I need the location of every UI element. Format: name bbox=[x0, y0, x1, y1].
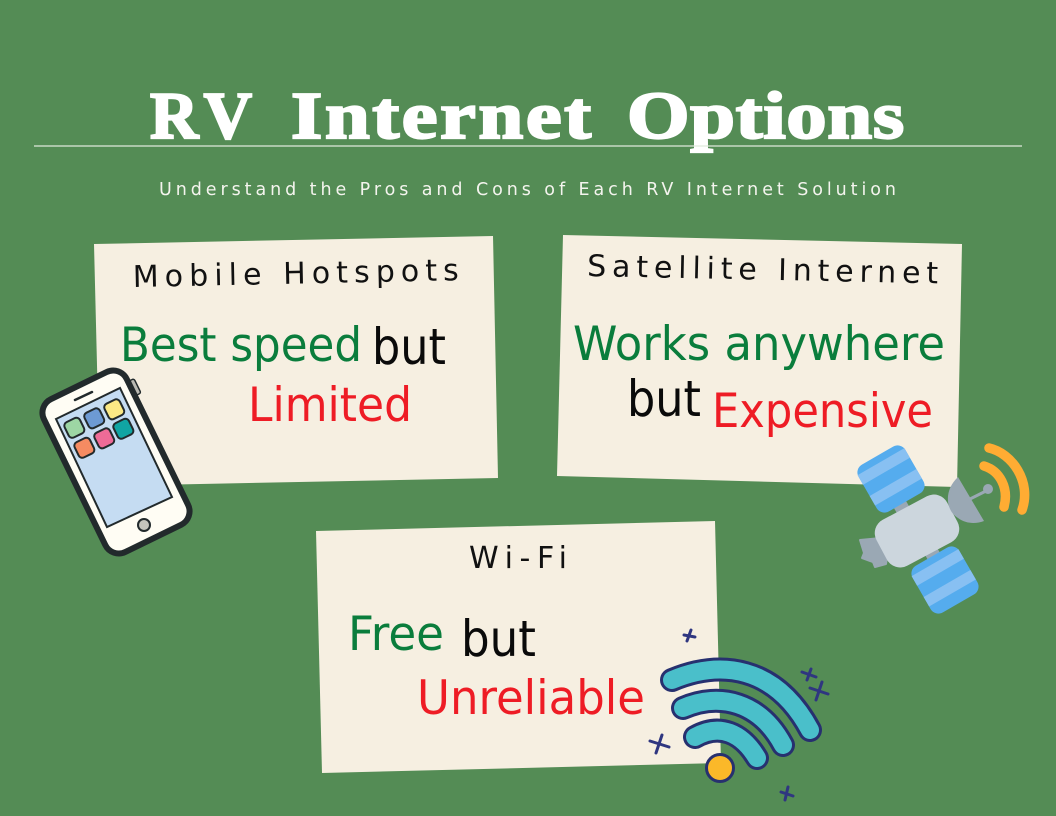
text: limited: Limited bbox=[248, 378, 412, 433]
panel: wi-fi bbox=[316, 521, 721, 773]
text: best speed: Best speed bbox=[120, 318, 362, 373]
text: works anywhere: Works anywhere bbox=[573, 317, 945, 372]
icon: satellite bbox=[854, 442, 1025, 617]
text: expensive: Expensive bbox=[712, 384, 933, 439]
heading: wi-fi: Wi-Fi bbox=[469, 541, 567, 576]
title: Options bbox=[627, 79, 904, 153]
heading: mobile hotspots: Mobile Hotspots bbox=[132, 253, 459, 295]
text: but: but bbox=[627, 370, 701, 428]
subtitle: Understand the Pros and Cons of Each RV Internet Solution bbox=[159, 180, 896, 200]
solar panel bottom bbox=[908, 543, 982, 617]
title: Internet bbox=[291, 79, 591, 153]
title bbox=[150, 79, 904, 153]
icon: wi-fi signal bbox=[650, 630, 828, 800]
solar panel top bbox=[854, 442, 928, 516]
text: but: but bbox=[372, 318, 446, 376]
icon: smartphone bbox=[37, 365, 195, 559]
panel: mobile hotspots bbox=[94, 236, 498, 486]
text: free: Free bbox=[348, 607, 444, 662]
text: unreliable: Unreliable bbox=[417, 671, 645, 726]
title: RV bbox=[150, 79, 252, 153]
panel: satellite internet bbox=[557, 235, 962, 487]
text: but: but bbox=[461, 610, 536, 668]
heading: satellite internet: Satellite Internet bbox=[587, 249, 939, 291]
